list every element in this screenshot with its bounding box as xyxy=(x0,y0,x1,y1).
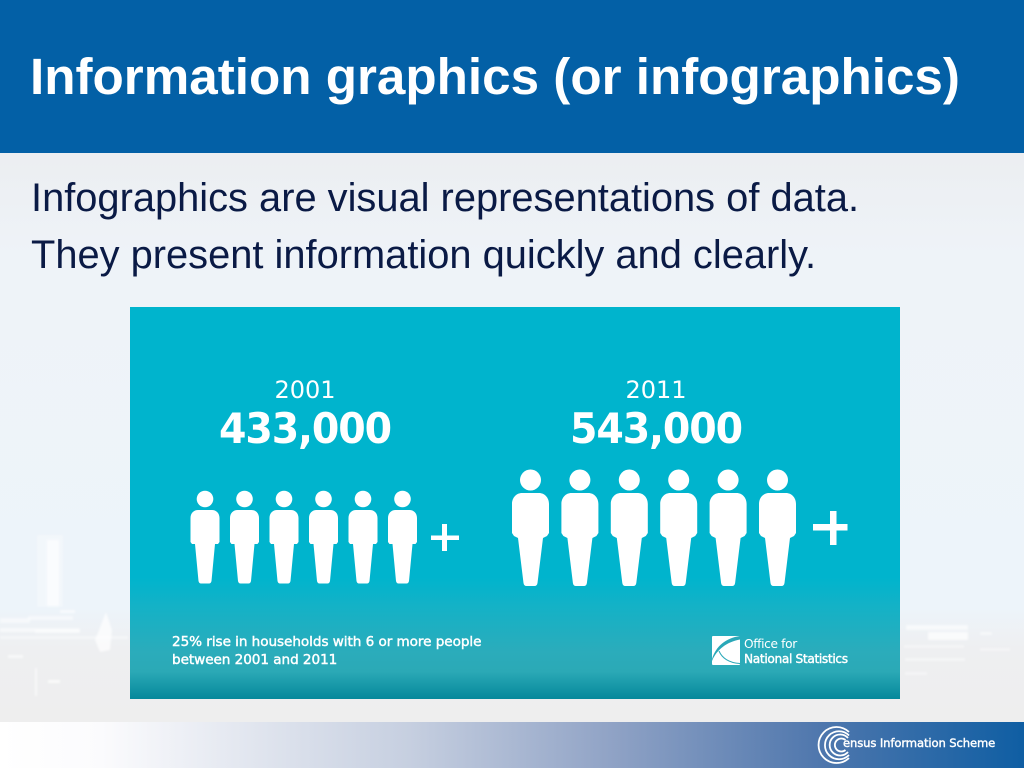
caption: 25% rise in households with 6 or more people xyxy=(172,634,481,650)
panel: infographic xyxy=(130,307,900,699)
logo text: Office for National Statistics: National Statistics xyxy=(744,652,848,666)
year 2001: 2001 xyxy=(274,376,336,404)
person 3 xyxy=(270,491,298,584)
person 2 xyxy=(561,470,598,586)
intro text: Infographics are visual representations of data. xyxy=(31,176,859,220)
background: pale sky and skyline xyxy=(2,535,968,682)
figure 433,000: 433,000 xyxy=(219,404,391,453)
footer text: Census Information Scheme: ensus Information Scheme xyxy=(843,736,995,750)
person 4 xyxy=(309,491,338,584)
person 4 xyxy=(660,470,697,586)
plus sign xyxy=(431,524,459,551)
person 5 xyxy=(710,470,747,586)
person 5 xyxy=(348,491,378,584)
footer band xyxy=(0,722,1024,768)
title banner xyxy=(0,0,1024,153)
icon: census logo rings xyxy=(818,726,850,764)
caption xyxy=(172,634,481,668)
logo text: Office for National Statistics xyxy=(744,637,848,666)
plus sign xyxy=(813,511,848,545)
logo text: Office for National Statistics: Office for xyxy=(744,637,797,651)
people 2001 pictogram xyxy=(190,490,459,584)
person 6 xyxy=(388,491,417,584)
person 3 xyxy=(611,470,648,586)
caption: between 2001 and 2011 xyxy=(172,652,337,668)
figure 543,000: 543,000 xyxy=(570,404,742,453)
intro text: They present information quickly and clearly. xyxy=(31,233,816,277)
person 1 xyxy=(512,470,549,586)
people 2011 pictogram xyxy=(512,470,848,586)
person 6 xyxy=(759,470,796,586)
person 2 xyxy=(230,491,259,584)
intro text xyxy=(31,176,859,277)
title: Information graphics (or infographics) xyxy=(30,48,960,105)
person 1 xyxy=(190,491,220,584)
year 2011: 2011 xyxy=(625,376,687,404)
icon: ONS logo xyxy=(712,636,740,665)
